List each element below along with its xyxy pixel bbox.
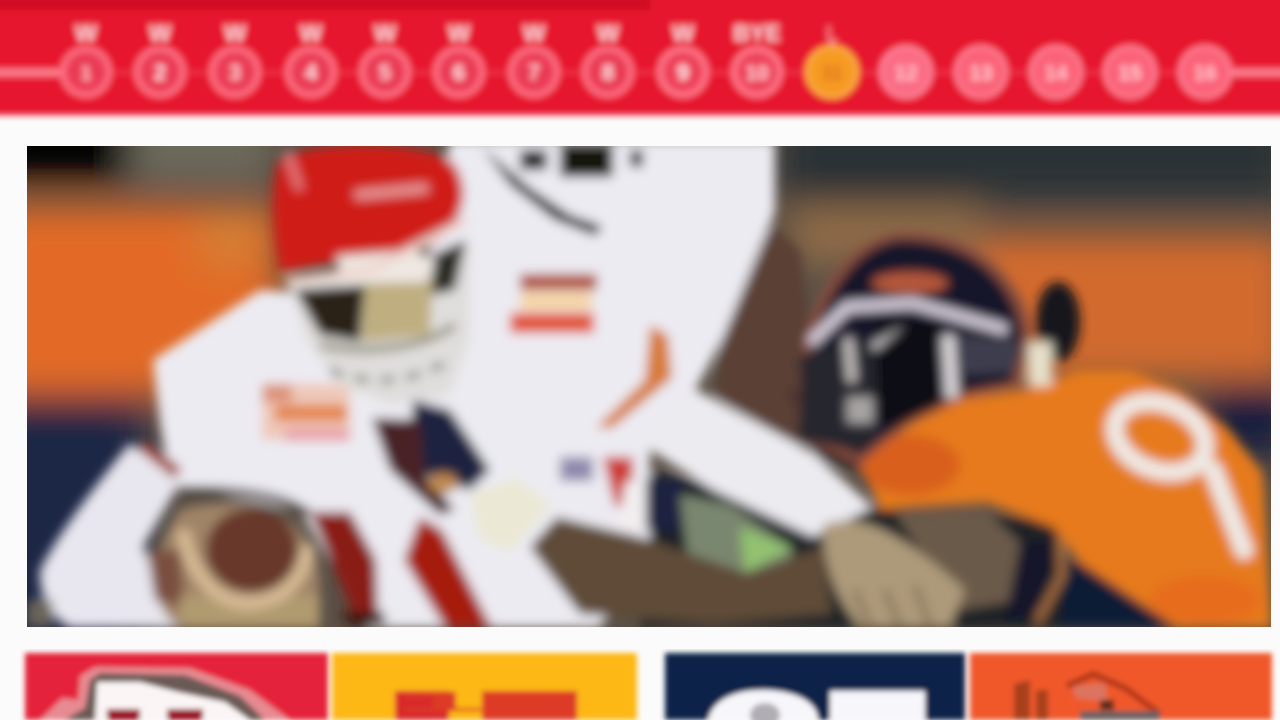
teammate helmet markings (482, 147, 602, 236)
navy gap (646, 478, 684, 530)
week 8 marker: W (597, 20, 619, 46)
week 12 marker: 12 (894, 62, 918, 85)
week 3 marker: 3 (229, 60, 241, 85)
week 5 marker (362, 20, 408, 95)
week 9 marker: 9 (677, 60, 689, 85)
bye week marker: 10 (745, 62, 769, 85)
forearm (530, 517, 832, 624)
week 6 marker: 6 (453, 60, 465, 85)
week 14 marker: 14 (1044, 62, 1068, 85)
panel: game photo (27, 146, 1271, 627)
chiefs team block (25, 653, 328, 720)
navy pants (1062, 560, 1170, 627)
week 7 marker: 7 (528, 60, 540, 85)
week 7 marker: W (523, 20, 545, 46)
chin strap (1028, 342, 1052, 386)
week 2 marker (137, 20, 183, 95)
week 12 marker (881, 47, 931, 97)
qb red helmet (273, 145, 463, 272)
week 1 marker (63, 20, 109, 95)
helmet shadow and stripe (798, 340, 880, 450)
red pants (310, 512, 378, 620)
week 1 marker: W (75, 20, 97, 46)
sleeve number (262, 384, 350, 441)
bye week marker: BYE (733, 20, 781, 46)
week 2 marker: 2 (154, 60, 166, 85)
week 3 marker (212, 20, 258, 95)
week 6 marker (436, 20, 482, 95)
week 8 marker (585, 20, 631, 95)
panel: final score bar (25, 653, 1272, 720)
week 16 marker: 16 (1193, 62, 1217, 85)
helmet stripe and visor (337, 250, 436, 284)
week 9 marker (660, 20, 706, 95)
broncos score (665, 653, 965, 720)
week 4 marker: 4 (305, 60, 318, 85)
lower background between arms (640, 470, 1075, 628)
football (156, 504, 319, 628)
opposing forearm (895, 510, 1022, 610)
week 7 marker (511, 20, 557, 95)
jersey number 9 (1104, 389, 1244, 550)
white jersey torso (153, 140, 775, 628)
week 16 marker (1180, 47, 1230, 97)
week 5 marker: 5 (379, 60, 391, 85)
orange jersey (860, 370, 1272, 628)
left arm (40, 443, 180, 628)
week 9 marker: W (672, 20, 694, 46)
week 15 marker (1105, 47, 1155, 97)
week 11 marker: current loss: L (826, 21, 838, 46)
week 6 marker: W (448, 20, 470, 46)
week 2 marker: W (149, 20, 171, 46)
glove (410, 400, 490, 490)
chest number (510, 274, 597, 333)
week 1 marker: 1 (80, 63, 92, 85)
week 11 marker: current loss (807, 21, 857, 97)
week 15 marker: 15 (1118, 62, 1142, 85)
bye week marker (733, 20, 781, 95)
broncos score: 27 (832, 686, 922, 717)
broncos team block (970, 653, 1272, 720)
chiefs score (332, 653, 637, 720)
week 13 marker (956, 47, 1006, 97)
red inner stripe (603, 457, 633, 507)
dark figure behind the helmet (1036, 282, 1080, 362)
week 14 marker (1031, 47, 1081, 97)
wrist tape (468, 477, 552, 552)
qb face and facemask (290, 240, 470, 405)
chiefs score: 17 (395, 686, 577, 717)
week 4 marker: W (300, 20, 322, 46)
week 8 marker: 8 (602, 60, 614, 85)
week 5 marker: W (374, 20, 396, 46)
week 3 marker: W (224, 20, 246, 46)
week 13 marker: 13 (969, 62, 993, 85)
broncos helmet (797, 232, 1032, 465)
hand (823, 521, 965, 627)
panel: season schedule strip (0, 0, 1280, 115)
week 4 marker (288, 20, 334, 95)
week 11 marker: current loss: 11 (822, 63, 842, 84)
grey-green wristband (680, 495, 792, 575)
defender upper arm (715, 225, 820, 450)
white sleeve (630, 390, 873, 537)
red-brown sleeve stripe (140, 447, 177, 475)
